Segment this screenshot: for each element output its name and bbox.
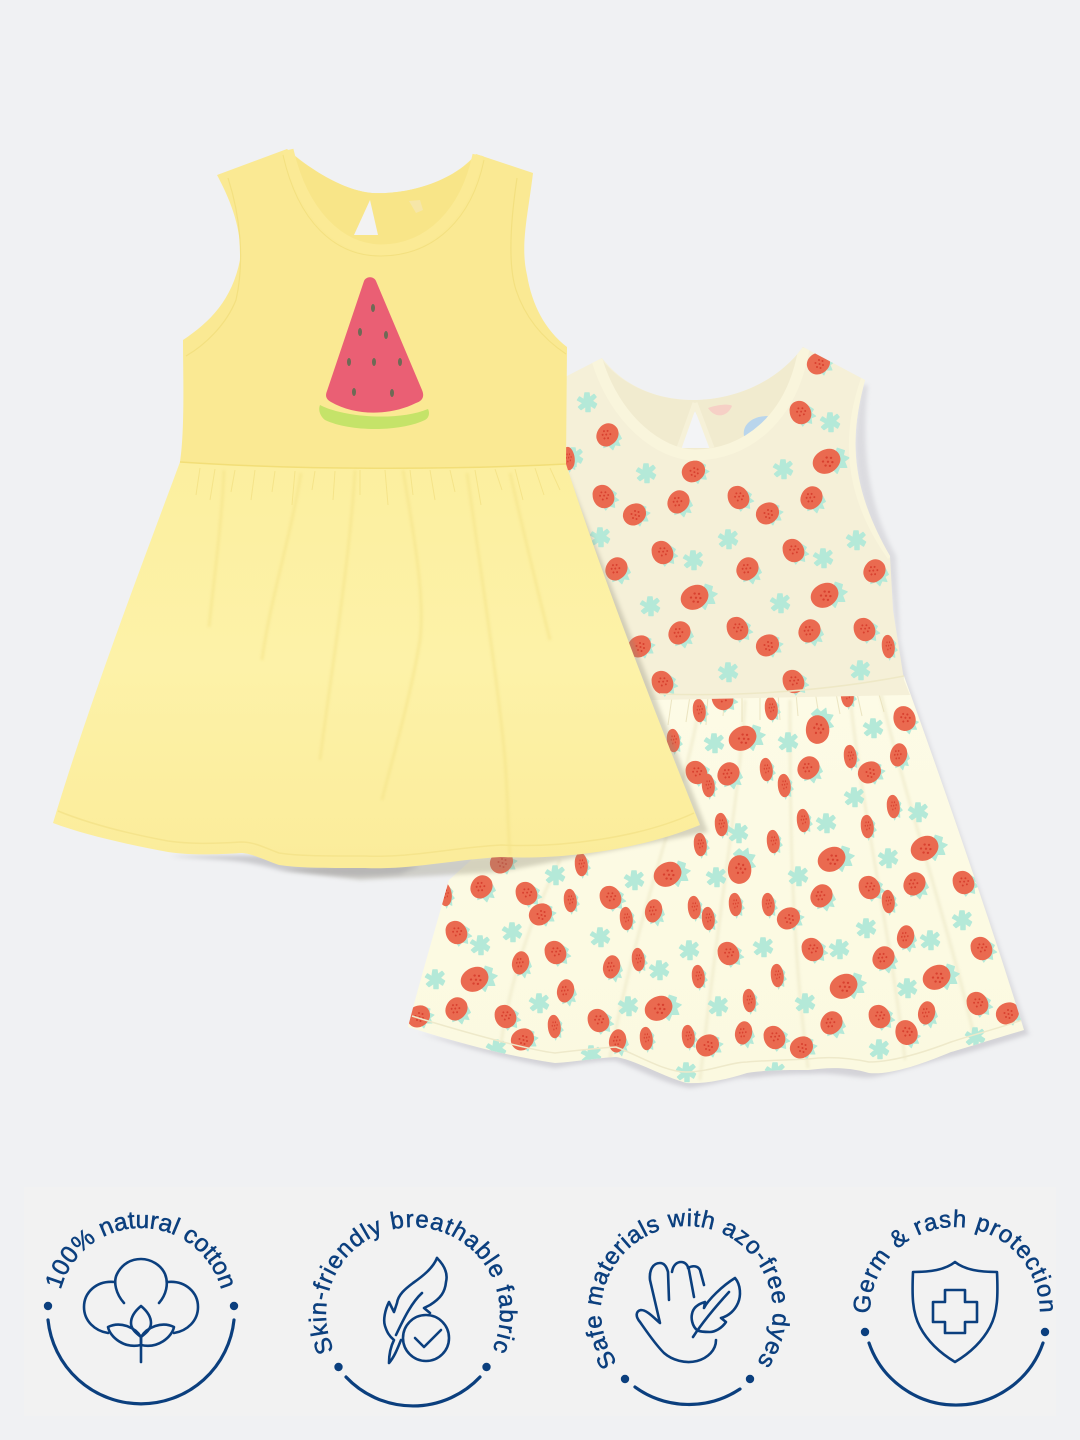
waist seam [180,462,566,468]
seeds [347,304,402,397]
keyhole opening [354,200,378,235]
cream bodice [550,340,920,700]
badge: skin-friendly breathable fabric [308,1211,518,1408]
rind [319,405,429,429]
dots [334,1363,343,1371]
arc [346,1377,480,1406]
hem stitch [412,1016,1022,1072]
icon: feather with check [384,1258,449,1363]
icon: shield with cross [913,1262,997,1362]
yellow bodice [180,149,567,468]
back neck panel [287,150,476,246]
back neck panel [604,355,797,450]
collar band [288,150,478,250]
waist seam [660,676,904,695]
skirt folds [209,470,550,855]
inner label print [744,416,768,436]
collar band [597,348,804,455]
badge: germ and rash protection [853,1209,1053,1407]
armhole band [849,457,890,555]
bodice strawberries [561,352,899,699]
badge: safe materials with azo-free dyes [586,1208,790,1406]
arc [869,1343,1043,1405]
curved label: Skin-friendly breathable fabric [308,1211,518,1354]
keyhole opening [682,412,710,448]
curved label: Germ & rash protection [853,1209,1053,1312]
badge strip background [24,1187,1056,1416]
flesh [326,277,423,413]
dots [861,1328,869,1336]
button loop [679,403,712,448]
curved label: Safe materials with azo-free dyes [586,1208,790,1368]
shadow of yellow dress on cream dress [280,470,708,880]
icon: hand with feather [637,1262,740,1362]
watermelon print [319,277,429,429]
neck label [409,200,423,213]
waist gathers [196,468,560,505]
armhole stitching [186,178,241,356]
skirt strawberries [407,674,1023,1082]
yellow dress shadow on background [170,855,420,876]
right side shadow [855,385,1028,1030]
badge: 100% natural cotton [44,1212,238,1406]
skirt fold shading [500,690,975,1080]
arc [635,1387,740,1404]
dots [44,1302,52,1310]
icon: cotton boll [84,1259,198,1362]
cream skirt [400,670,1040,1090]
curved label: 100% natural cotton [46,1212,233,1289]
arc [48,1320,234,1404]
dots [621,1375,629,1383]
hem stitch [58,811,694,856]
dress: cream strawberry print [400,340,1040,1090]
yellow skirt [53,462,700,868]
dress shadow [420,1028,1030,1088]
dress: yellow with watermelon [53,149,700,868]
